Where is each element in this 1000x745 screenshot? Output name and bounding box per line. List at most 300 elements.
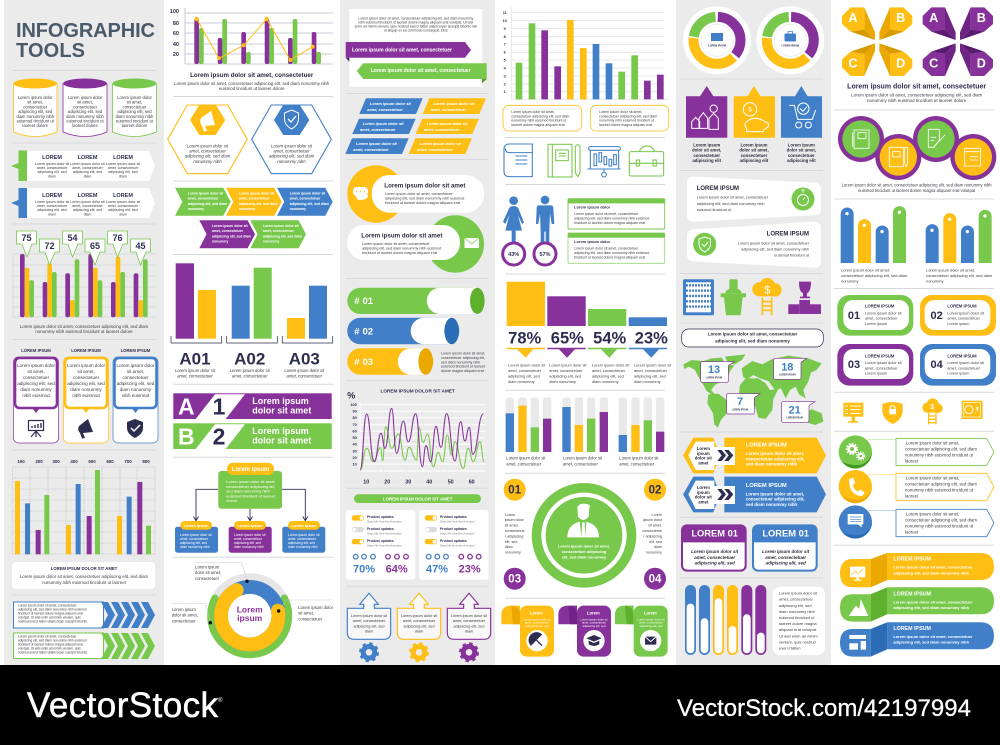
tiles caption: Lorem ipsum dolor sit amet, consectetuer adipiscing elit, sed diam bbox=[851, 92, 982, 97]
parallelogram list: Lorem ipsum dolor sit bbox=[420, 141, 462, 146]
banner: B2: dolor sit amet bbox=[252, 436, 311, 446]
line chart: 20 bbox=[384, 479, 390, 485]
text boxes under chart: consectetuer adipiscing elit, sed diam bbox=[599, 114, 657, 118]
callout 21: 21 bbox=[789, 405, 801, 417]
ribbon: green: LOREM IPSUM bbox=[893, 591, 931, 597]
step chart with percentages: diam nonummy bbox=[508, 379, 535, 384]
icon: journal and pencil bbox=[889, 147, 908, 167]
radial diagram with person: r adipiscing bbox=[505, 534, 523, 538]
callout 7: 7 bbox=[737, 396, 743, 408]
bar 03: # bbox=[354, 357, 360, 368]
parallelogram list: Lorem ipsum dolor sit bbox=[356, 141, 398, 146]
bar chart with callouts bbox=[13, 231, 156, 317]
hexagon: yellow: nonummy nibh bbox=[193, 159, 222, 164]
bar chart: eight columns: 700 bbox=[124, 459, 132, 464]
ribbon: blue: Lorem ipsum dolor sit amet, consectetuer bbox=[893, 634, 973, 639]
step: green second: Lorem ipsum dolor sit bbox=[263, 224, 299, 228]
tiles caption: nonummy nibh euismod tincidunt ut laoreet dolore bbox=[867, 98, 967, 103]
org chart: Lorem ipsum bbox=[237, 523, 263, 528]
vertical gauge pills bbox=[685, 585, 825, 655]
icon: male figure bbox=[536, 196, 554, 243]
blue arrow row: Lorem ipsum dolor sit bbox=[70, 200, 105, 204]
green arrow row: LOREM bbox=[78, 155, 98, 161]
hex arrow: yellow bbox=[683, 438, 826, 473]
icon: female figure bbox=[503, 196, 524, 243]
donut diagram: consectetuer bbox=[172, 618, 196, 623]
step: green: amet, consectetuer bbox=[188, 197, 219, 201]
step chart with percentages: 65% bbox=[551, 329, 584, 347]
rounded bars with pins bbox=[841, 206, 993, 284]
badge 01 bbox=[504, 479, 526, 501]
chart caption bbox=[20, 324, 149, 334]
bar chart with callouts: 72 bbox=[44, 241, 55, 251]
icon: speech bubbles bbox=[353, 187, 368, 200]
blue card: consectetuer bbox=[122, 375, 149, 380]
step: yellow: amet, consectetuer bbox=[239, 197, 270, 201]
hexagon: yellow: amet, consectetuer bbox=[189, 149, 226, 154]
bar 01 bbox=[347, 288, 485, 314]
bar chart: A01 to A03: A01 bbox=[179, 349, 211, 368]
title: INFOGRAPHIC bbox=[16, 20, 155, 42]
circle callout: mail: Lorem ipsum dolor sit amet bbox=[361, 232, 442, 239]
bar chart: three quads: Lorem ipsum dolor sit bbox=[619, 455, 659, 460]
icon: notebook and pencil bbox=[548, 144, 580, 177]
purple cylinder: consectetuer bbox=[73, 104, 98, 109]
footer logo: VectorStock bbox=[27, 686, 218, 725]
line chart: 100 bbox=[350, 403, 357, 407]
card 03: Lorem ipsum dolor sit bbox=[865, 361, 903, 365]
blue card: Lorem ipsum dolor bbox=[116, 363, 155, 368]
text boxes under chart bbox=[503, 105, 669, 131]
callout 21: LOREM IPSUM bbox=[786, 418, 803, 420]
card 01: amet, consectetuer bbox=[865, 317, 898, 321]
panel: toggles card left bbox=[346, 510, 415, 580]
footer url: VectorStock.com/42197994 bbox=[677, 695, 971, 722]
bar chart: three quads: Lorem ipsum dolor sit bbox=[506, 455, 546, 460]
green cylinder: sit amet, bbox=[127, 100, 142, 105]
text boxes: people bbox=[568, 199, 665, 263]
radial diagram with person: elit, sed bbox=[649, 540, 662, 544]
green arrow row: amet, consectetuer bbox=[37, 166, 68, 170]
step: purple: adipiscing elit, sed diam bbox=[212, 234, 251, 238]
cylinder bars: consectetuer adipiscing elit, bbox=[441, 356, 485, 360]
donut 2: LOREM IPSUM bbox=[781, 45, 799, 48]
hex arrow: yellow: sed diam nonummy nibh bbox=[746, 462, 798, 467]
chart heading: Lorem ipsum dolor sit amet, consectetuer bbox=[190, 72, 314, 79]
radial diagram with person bbox=[504, 479, 666, 590]
linked circles with office icons: Lorem ipsum dolor sit amet, consectetuer adipiscing elit, sed diam nonummy nibh bbox=[842, 182, 992, 187]
yellow card bbox=[64, 348, 108, 443]
green arrow row: LOREM bbox=[113, 155, 133, 161]
list item: phone: laoreet bbox=[905, 493, 919, 498]
linked circles with office icons: euismod tincidunt ut laoreet dolore magna aliquam erat volutpat bbox=[858, 188, 976, 193]
yellow card: nibh euismod bbox=[72, 393, 100, 398]
radial diagram with person: nonummy bbox=[646, 551, 662, 555]
badge 03: 03 bbox=[508, 574, 521, 586]
text boxes: people: Lorem ipsum dolor sit amet, consectetuer bbox=[574, 246, 639, 250]
blue arrow row bbox=[11, 188, 155, 218]
fold card: graduation cap: Lorem ipsum dolor sit bbox=[580, 617, 608, 621]
icon tile captions: dolor sit amet, bbox=[739, 148, 769, 153]
radial diagram with person: sit amet, bbox=[505, 524, 519, 528]
icon tile captions: adipiscing elit bbox=[787, 158, 816, 163]
card 02: Lorem ipsum bbox=[947, 322, 969, 326]
fold card: umbrella: Lorem ipsum dolor sit bbox=[523, 617, 551, 621]
card 02: 02 bbox=[931, 310, 943, 322]
gauge text box: amet, consectetuer bbox=[779, 597, 814, 602]
org chart bbox=[175, 463, 325, 553]
step chart with percentages: diam nonummy bbox=[549, 379, 576, 384]
hex arrow: blue: LOREM IPSUM bbox=[746, 483, 787, 489]
panel: toggles card right: Start life free the freedom bbox=[440, 520, 475, 524]
circle callout: mail: adipiscing elit, sed diam nonummy nibh euismod bbox=[362, 246, 441, 250]
org chart: Lorem ipsum bbox=[291, 523, 317, 528]
hex arrow: yellow: ipsum bbox=[697, 451, 710, 456]
yellow card: adipiscing elit, sed bbox=[67, 381, 105, 386]
yellow ABCD tiles: A bbox=[848, 11, 858, 25]
hex arrow: yellow: dolor sit bbox=[695, 456, 712, 461]
yellow ABCD tiles: B bbox=[896, 11, 905, 25]
cylinder bars: euismod tincidunt ut laoreet bbox=[441, 365, 485, 369]
gauge text box: adipiscing elit, sed bbox=[779, 603, 812, 608]
line chart: 10 bbox=[352, 462, 357, 466]
panel: toggles card right: Start life free the freedom bbox=[440, 532, 475, 536]
hex arrow: yellow: Lorem ipsum dolor sit amet, bbox=[746, 451, 804, 456]
combo chart bbox=[170, 8, 333, 64]
panel: ribbons: Lorem ipsum dolor sit amet, consectetuer adipiscing elit, sed diam nonummy bbox=[358, 16, 474, 20]
panel: toggles card right: 47% bbox=[426, 563, 448, 575]
bar chart: twelve bars: 4 bbox=[504, 66, 507, 70]
yellow card: LOREM IPSUM bbox=[71, 348, 101, 353]
panel: up arrows with gears: Lorem ipsum dolor sit bbox=[451, 614, 488, 618]
icon: shield badge bbox=[693, 233, 716, 256]
line chart: 60 bbox=[352, 430, 357, 434]
circle callout: mail: Lorem ipsum dolor sit amet, consectetuer bbox=[362, 242, 430, 246]
card: purple: amet, consectetuer bbox=[694, 555, 735, 560]
text boxes under chart: Lorem ipsum dolor sit amet, bbox=[511, 110, 555, 114]
badge 03 bbox=[504, 568, 526, 590]
rounded bars with pins: Lorem ipsum dolor sit amet, bbox=[926, 268, 975, 273]
chevron text box: green: adipiscing elit, sed diam nonummy nibh euismod bbox=[18, 638, 87, 642]
purple card: diam nonummy bbox=[20, 387, 52, 392]
panel: toggles card right bbox=[419, 510, 489, 580]
hexagon: blue: adipiscing elit, sed diam bbox=[269, 154, 315, 159]
title bbox=[16, 20, 155, 62]
line chart: 30 bbox=[405, 479, 411, 485]
line chart bbox=[347, 388, 486, 485]
yellow cylinder: sit amet, bbox=[27, 100, 43, 105]
hex arrow: blue bbox=[683, 477, 826, 512]
icon: megaphone bbox=[200, 111, 215, 132]
map continents bbox=[683, 354, 823, 428]
gauge text box: exerci tation bbox=[779, 646, 800, 651]
step: yellow bbox=[226, 188, 282, 216]
banner: A1 bbox=[173, 393, 332, 419]
yellow cylinder: adipiscing elit, sed bbox=[18, 109, 53, 114]
radial diagram with person: r adipiscing bbox=[643, 534, 662, 538]
text box: chart note: Lorem ipsum dolor sit amet, consectetuer adipiscing elit, sed diam bbox=[20, 574, 149, 579]
text boxes under chart: Lorem ipsum dolor sit amet, bbox=[599, 110, 642, 114]
step: purple: Lorem ipsum dolor sit bbox=[212, 224, 248, 228]
radial diagram with person: ipsum dolor bbox=[505, 518, 525, 522]
radial diagram with person: elit, sed bbox=[505, 540, 517, 544]
callout 18 bbox=[774, 358, 807, 379]
rounded bars with pins: consectetuer adipiscing elit, sed diam bbox=[841, 273, 908, 278]
purple ribbon bbox=[346, 42, 471, 62]
card 01: 01 bbox=[848, 310, 860, 322]
ribbon: yellow: adipiscing elit, sed diam nonummy nibh bbox=[893, 570, 970, 575]
purple ABCD tiles: A bbox=[929, 11, 938, 25]
white callout: stopwatch: adipiscing elit, sed diam nonummy nibh bbox=[697, 201, 765, 206]
icon: yellow gear bbox=[410, 644, 428, 661]
icon: purple gear bbox=[460, 644, 478, 661]
rounded bars with pins: Lorem ipsum dolor sit amet, bbox=[841, 268, 890, 273]
org chart: Lorem ipsum bbox=[183, 523, 209, 528]
card 04 bbox=[920, 344, 996, 386]
text boxes: people: Lorem ipsum dolor sit amet, consectetuer bbox=[574, 212, 639, 216]
banner: B2: B bbox=[178, 423, 195, 449]
list item: chat: Lorem ipsum dolor sit amet, bbox=[906, 511, 959, 516]
green arrow row: Lorem ipsum dolor sit bbox=[35, 162, 69, 166]
ribbon: blue: LOREM IPSUM bbox=[893, 626, 931, 632]
bar chart: A01 to A03: amet, consectetuer bbox=[286, 374, 323, 378]
white callout: stopwatch bbox=[687, 177, 821, 222]
purple card: Lorem ipsum dolor bbox=[17, 363, 55, 368]
step chart with percentages: amet, consectetuer bbox=[549, 368, 583, 373]
footer band bbox=[0, 665, 1000, 745]
icon: shield lock bbox=[882, 402, 903, 424]
bar chart: eight columns: 300 bbox=[52, 459, 60, 464]
chart heading: euismod tincidunt ut laoreet dolore bbox=[219, 86, 285, 91]
green ribbon bbox=[357, 63, 487, 83]
radial diagram with person: Lorem bbox=[652, 513, 662, 517]
parallelogram list: amet, consectetuer bbox=[360, 127, 396, 132]
green arrow row: adipiscing elit, sed bbox=[37, 170, 67, 174]
org chart: Lorem ipsum dolor sit bbox=[234, 533, 266, 537]
radial diagram with person: sit amet, bbox=[648, 524, 662, 528]
hexagon: blue bbox=[252, 105, 331, 174]
green cylinder bbox=[112, 78, 156, 136]
bar chart: twelve bars bbox=[503, 7, 669, 99]
white callout: stopwatch: Lorem ipsum dolor sit amet, consectetuer bbox=[697, 195, 769, 200]
blue card: adipiscing elit, sed bbox=[117, 381, 155, 386]
line chart: 50 bbox=[352, 436, 357, 440]
blue arrow row: diam bbox=[84, 212, 91, 216]
circle icon list bbox=[839, 435, 994, 539]
panel: cylinders bbox=[13, 78, 157, 136]
green arrow row: diam bbox=[84, 174, 91, 178]
fold card: graduation cap bbox=[558, 606, 611, 657]
org chart: adipiscing elit, sed bbox=[288, 541, 315, 545]
radial diagram with person: ipsum dolor bbox=[643, 518, 663, 522]
green arrow row: Lorem ipsum dolor sit bbox=[70, 162, 105, 166]
bar chart with callouts: 76 bbox=[112, 233, 123, 243]
bar chart: twelve bars: 9 bbox=[504, 27, 506, 31]
people gender split: 43% bbox=[508, 252, 519, 258]
chevron text box: blue: Lorem ipsum dolor sit amet, consectetuer bbox=[18, 604, 77, 608]
bar 02: # bbox=[354, 326, 360, 338]
donut diagram: Lorem bbox=[237, 605, 263, 615]
step: yellow: adipiscing elit, sed diam bbox=[239, 202, 278, 206]
blue card bbox=[113, 348, 158, 443]
green cylinder: laoreet dolore bbox=[122, 123, 148, 128]
card 01: Lorem ipsum bbox=[865, 322, 887, 326]
icon tile captions: Lorem ipsum bbox=[788, 142, 815, 147]
hex arrow: yellow: consectetuer adipiscing elit, bbox=[746, 456, 805, 461]
bar chart: twelve bars: 7 bbox=[504, 43, 506, 47]
org chart: diam nonummy nibh bbox=[180, 545, 210, 549]
list item: chat bbox=[839, 505, 994, 539]
callout 7: LOREM IPSUM bbox=[732, 410, 748, 412]
list item: phone: nonummy nibh euismod tincidunt ut bbox=[905, 487, 974, 492]
step: purple: nonummy bbox=[212, 240, 228, 244]
tile: shopping cart bbox=[781, 86, 822, 138]
step chart with percentages: adipiscing elit, sed bbox=[508, 374, 540, 378]
combo chart: 100 bbox=[170, 9, 179, 15]
line chart: 40 bbox=[426, 479, 432, 485]
text boxes: people: Lorem ipsum dolor bbox=[574, 205, 611, 210]
bar chart: twelve bars: 8 bbox=[504, 35, 506, 39]
bar chart: twelve bars: 6 bbox=[504, 51, 506, 55]
yellow card: Lorem ipsum dolor bbox=[67, 363, 105, 368]
green arrow row: amet, consectetuer bbox=[108, 166, 139, 170]
step: green: Lorem ipsum dolor sit bbox=[188, 192, 224, 196]
donut diagram: consectetuer bbox=[195, 576, 220, 581]
bar chart: eight columns: 800 bbox=[142, 459, 150, 464]
org chart: Lorem ipsum dolor sit bbox=[288, 533, 320, 537]
badge 02 bbox=[644, 479, 666, 501]
card 02: LOREM IPSUM bbox=[947, 304, 977, 309]
radial diagram with person: consectetue bbox=[642, 529, 662, 533]
step chart with percentages: amet, consectetuer bbox=[508, 368, 542, 373]
icon: presentation screen bbox=[587, 147, 621, 177]
bar chart: twelve bars: 11 bbox=[503, 11, 507, 15]
cylinder bars: Lorem ipsum dolor sit amet, bbox=[441, 352, 485, 356]
circle callout: chat: adipiscing elit, sed diam nonummy nibh euismod bbox=[385, 196, 464, 200]
people gender split bbox=[503, 196, 556, 265]
hex arrow rows bbox=[683, 438, 826, 512]
yellow card: diam nonummy bbox=[70, 387, 102, 392]
fold card: graduation cap: amet, consectetuer bbox=[582, 621, 606, 625]
icon: chart monitor bbox=[850, 567, 865, 581]
purple card bbox=[14, 348, 58, 443]
step chart with percentages: amet, consectetuer bbox=[592, 368, 626, 373]
hex arrow: blue: ipsum bbox=[697, 490, 710, 495]
icon: cloud money ladder: $ bbox=[764, 284, 770, 296]
donut diagram: consectetuer bbox=[298, 616, 323, 621]
yellow ABCD tiles: C bbox=[848, 57, 858, 71]
fold card: umbrella: adipiscing elit, sed bbox=[525, 624, 549, 628]
icon: shield bbox=[284, 110, 298, 129]
callout 13: LOREM IPSUM bbox=[706, 378, 722, 380]
panel: ribbons: enim ad minim veniam, quis nostrud exerci tation ullamcorper suscipit lobortis nisl bbox=[355, 24, 477, 28]
step: blue: amet, consectetuer bbox=[290, 197, 321, 201]
panel: icon cards bbox=[14, 348, 158, 443]
people gender split: 57% bbox=[540, 252, 551, 258]
card 01: Lorem ipsum dolor sit bbox=[865, 311, 903, 315]
parallelogram list: amet, consectetuer bbox=[417, 147, 453, 152]
green cylinder: consectetuer bbox=[123, 104, 147, 109]
green arrow row: diam bbox=[48, 174, 56, 178]
bar 01: 01 bbox=[362, 296, 374, 307]
step chart with percentages: amet, consectetuer bbox=[634, 368, 668, 373]
step: yellow: nonummy bbox=[239, 207, 255, 211]
blue arrow row: Lorem ipsum dolor sit bbox=[35, 200, 69, 204]
panel: ribbons bbox=[346, 9, 487, 87]
icon: note and pen bbox=[928, 129, 945, 147]
tile: growth bbox=[686, 86, 727, 138]
text boxes: people: adipiscing elit, sed diam nonummy nibh euismod bbox=[574, 216, 649, 220]
card: purple: Lorem ipsum dolor sit bbox=[691, 549, 739, 554]
parallelogram list bbox=[345, 98, 486, 154]
text boxes under chart: nonummy nibh euismod tincidunt ut bbox=[511, 119, 566, 123]
chevron text box: blue: volutpat. Ut wisi enim ad minim veniam, quis bbox=[18, 616, 81, 620]
banner: B2: 2 bbox=[213, 423, 225, 449]
radial diagram with person: nonummy bbox=[505, 551, 521, 555]
panel: up arrows with gears: diam bbox=[365, 630, 373, 634]
icon: presentation board bbox=[28, 420, 44, 437]
org chart: diam nonummy nibh bbox=[234, 545, 264, 549]
org chart: Lorem ipsum dolor sit amet, bbox=[226, 479, 276, 484]
circle callout: mail: tincidunt ut laoreet dolore magna aliquam erat bbox=[362, 251, 437, 255]
purple ABCD tiles: B bbox=[977, 11, 986, 25]
icon: abacus bbox=[683, 279, 714, 315]
hexagon: blue: Lorem ipsum dolor sit bbox=[271, 144, 313, 148]
donut 1: LOREM IPSUM bbox=[708, 45, 726, 48]
panel: toggles card right: Product updates bbox=[440, 527, 467, 531]
circle callout: chat: Lorem ipsum dolor sit amet, consectetuer bbox=[385, 192, 453, 196]
panel: ribbons: ut aliquip ex ea commodo consequat. Duis bbox=[384, 28, 448, 32]
yellow ABCD tiles: D bbox=[896, 57, 905, 71]
step chart with percentages: 23% bbox=[635, 329, 668, 347]
step chart with percentages: 54% bbox=[593, 329, 627, 347]
org chart: amet, consectetuer bbox=[180, 537, 209, 541]
bar chart: eight columns: 600 bbox=[106, 459, 114, 464]
card 03: amet, consectetuer bbox=[865, 366, 898, 370]
white callout: shield bbox=[687, 222, 821, 268]
step chart with percentages: adipiscing elit, sed bbox=[634, 374, 666, 378]
icon: envelope bbox=[464, 238, 479, 248]
fold card: umbrella: Lorem bbox=[530, 610, 543, 615]
rounded bars with pins: nonummy bbox=[926, 279, 943, 284]
purple card: nibh euismod bbox=[22, 393, 50, 398]
step chart with percentages bbox=[507, 282, 672, 384]
numbered cards bbox=[837, 295, 996, 386]
banner: A1: Lorem ipsum bbox=[252, 396, 309, 406]
chevron text box: green bbox=[14, 633, 155, 659]
step: green: nonummy bbox=[188, 207, 204, 211]
icon tile captions bbox=[692, 142, 816, 163]
radial diagram with person: Lorem ipsum dolor sit amet, bbox=[558, 544, 610, 549]
card 02: Lorem ipsum dolor sit bbox=[947, 311, 985, 315]
icon: megaphone bbox=[78, 419, 93, 438]
org chart: Lorem ipsum bbox=[232, 467, 269, 473]
icon: storefront bbox=[849, 635, 866, 650]
line chart: 60 bbox=[469, 479, 475, 485]
hex arrow: yellow: Lorem bbox=[697, 446, 710, 451]
line chart: 80 bbox=[352, 416, 357, 420]
circle callout: chat: tincidunt ut laoreet dolore magna aliquam erat bbox=[385, 201, 460, 205]
radial diagram with person: consectetue bbox=[505, 529, 525, 533]
green cylinder: adipiscing elit, sed bbox=[117, 109, 152, 114]
bar 01: # bbox=[354, 296, 360, 307]
hex arrow: yellow: amet bbox=[698, 460, 709, 465]
icon: stopwatch bbox=[792, 188, 814, 210]
world map with callouts bbox=[683, 354, 823, 428]
donut diagram: sit amet, bbox=[298, 611, 314, 616]
panel: toggles card left: Product updates bbox=[367, 539, 394, 543]
ribbon: green: adipiscing elit, sed diam nonummy nibh bbox=[893, 605, 970, 610]
